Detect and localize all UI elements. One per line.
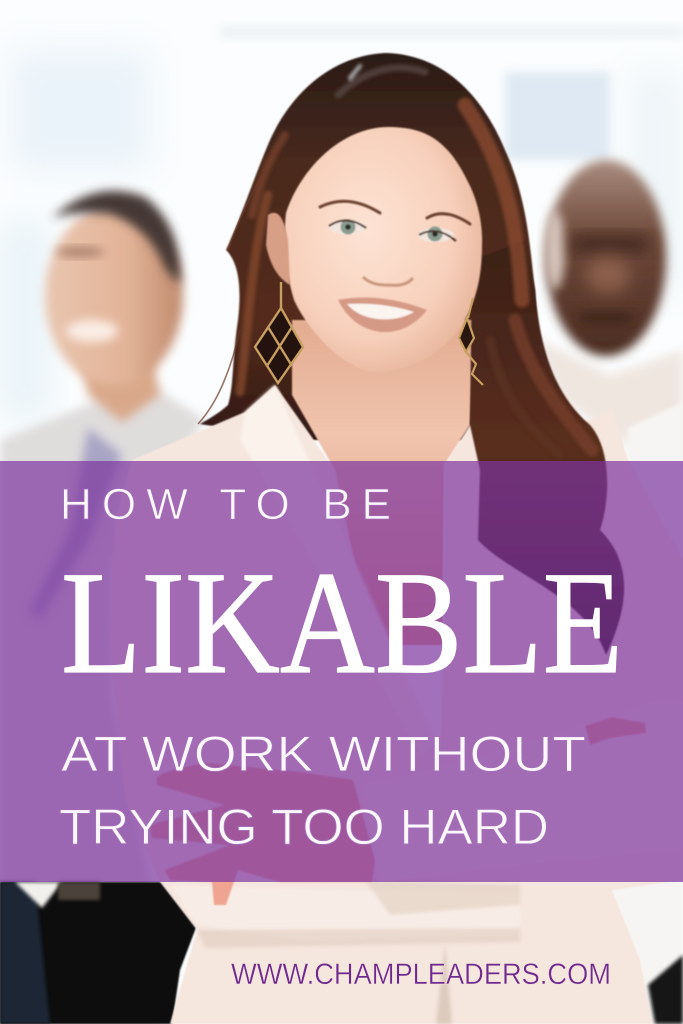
photo: jacket [110, 385, 683, 1024]
photo: jacket folds [170, 385, 520, 1024]
heading: at work without: AT WORK WITHOUT [61, 726, 586, 782]
photo: crossed arms sleeve [365, 700, 683, 882]
website url: WWW.CHAMPLEADERS.COM [231, 958, 611, 991]
photo: neck and chest [292, 320, 474, 645]
photo: hair highlights [240, 66, 592, 455]
nose shadow [363, 277, 413, 285]
mouth [338, 298, 427, 332]
purple translucent band [0, 461, 683, 882]
photo: hair front lock [470, 240, 624, 655]
photo: left hand [150, 763, 375, 905]
icon: left earring [255, 282, 303, 383]
heading: likable: LIKABLE [61, 541, 623, 704]
heading: how to be: HOW TO BE [60, 480, 391, 529]
ear [266, 213, 290, 285]
right eye [418, 226, 456, 242]
dark trousers left [0, 882, 197, 1024]
eyebrows [320, 201, 470, 224]
photo: face [266, 127, 482, 372]
icon: right earring [459, 298, 483, 385]
photo: hair wisps [198, 175, 262, 424]
left eye [329, 220, 366, 234]
photo: woman's hair back [200, 53, 537, 440]
photo: right hand [585, 717, 646, 745]
photo: blurred colleague right [530, 160, 683, 1024]
photo: blurred colleague left [0, 191, 205, 1024]
heading: trying too hard: TRYING TOO HARD [59, 799, 549, 855]
